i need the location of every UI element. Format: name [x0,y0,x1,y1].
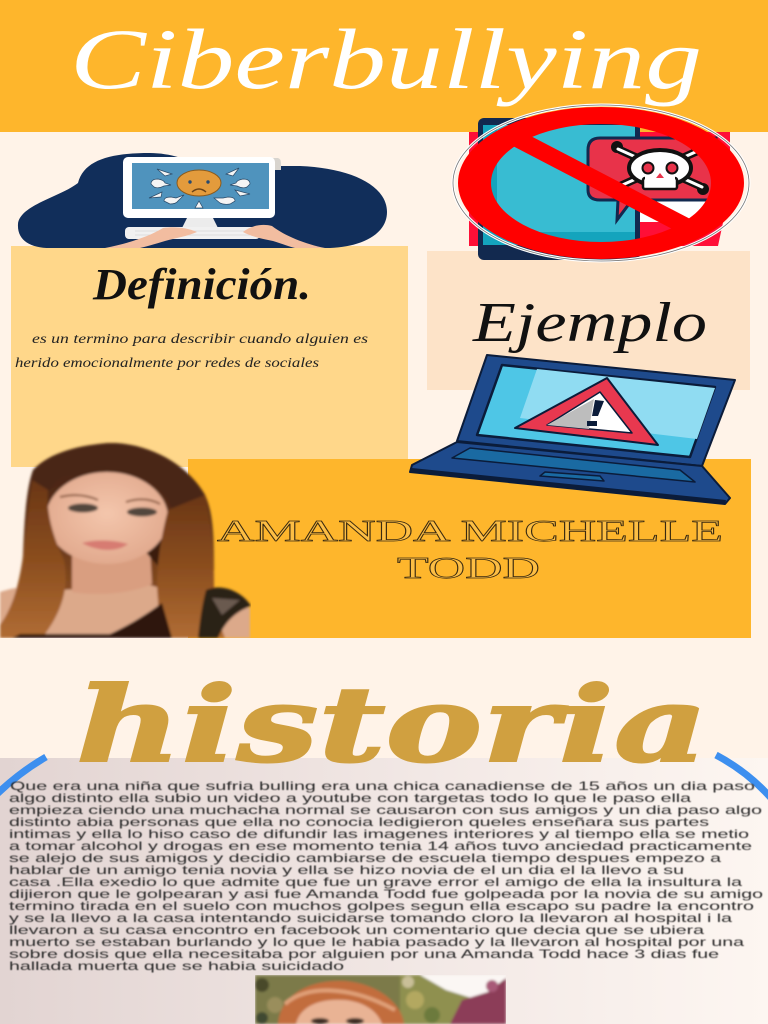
text: story: distinto abia personas que ella no conocia ledigieron queles enseñara sus partes [9,816,709,829]
heading: Ejemplo: Ejemplo [472,292,707,354]
text: story [9,780,763,973]
text: story: a tomar alcohol y drogas en ese momento tenia 14 años tuvo anciedad practicamente [9,840,752,853]
panel: story background [0,755,768,1024]
title: Ciberbullying: Ciberbullying [70,11,702,107]
text: name Amanda Michelle Todd [217,513,723,585]
text: story: termino tirada en el suelo con muchos golpes segun ella escapo su padre la encontro [9,900,754,913]
text: story: hallada muerta que se habia suicidado [9,960,344,973]
text: story: muerto se estaban burlando y lo que le habia pasado y la llevaron al hospital por una [9,936,745,949]
text: story: y se la llevo a la casa intentando suicidarse tomando cloro la llevaron al hospital i la [9,912,733,925]
text: story: llevaron a su casa encontro en facebook un comentario que decia que se ubiera [9,924,705,937]
text: definition [15,332,369,371]
heading: historia: historia [76,663,708,786]
text: name Amanda Michelle Todd: TODD [397,550,540,585]
text: definition: herido emocionalmente por redes de sociales [15,356,320,371]
text: story: intimas y ella lo hiso caso de difundir las imagenes interiores y al tiempo ella se metio [9,828,749,841]
text: story: sobre dosis que ella necesitaba por alguien por una Amanda Todd hace 3 dias fue [9,948,719,961]
text: name Amanda Michelle Todd: AMANDA MICHELLE [217,513,723,548]
photo: portrait of Amanda [0,443,251,638]
icon: computer with sad face and hands [18,153,387,248]
top title band [0,0,768,132]
text: story: algo distinto ella subio un video a youtube con targetas todo lo que le paso ella [9,792,692,805]
text: story: hablar de un amigo tenia novia y ella se hizo novia de el un dia el la llevo a su [9,864,684,877]
photo: Amanda outdoors [255,975,506,1024]
text: story: se alejo de sus amigos y decidio cambiarse de escuela tiempo despues empezo a [9,852,722,865]
panel: example [427,251,750,390]
icon: skull [611,141,709,195]
panel: name banner [188,459,751,638]
text: story: dijieron que le golpearan y asi fue Amanda Todd fue golpeada por la novia de su amigo [9,888,763,901]
heading: Definición: Definición. [92,260,311,309]
text: story: empieza ciendo una muchacha normal se causaron con sus amigos y un dia paso algo [9,804,762,817]
text: story: Que era una niña que sufria bulling era una chica canadiense de 15 años un dia paso [10,780,755,793]
panel: definition [11,246,408,467]
icon: laptop with warning triangle [410,355,735,504]
text: definition: es un termino para describir cuando alguien es [32,332,369,347]
text: story: casa .Ella exedio lo que admite que fue un grave error el amigo de ella la insultura la [9,876,743,889]
icon: phone with skull message and prohibition sign [453,105,749,261]
